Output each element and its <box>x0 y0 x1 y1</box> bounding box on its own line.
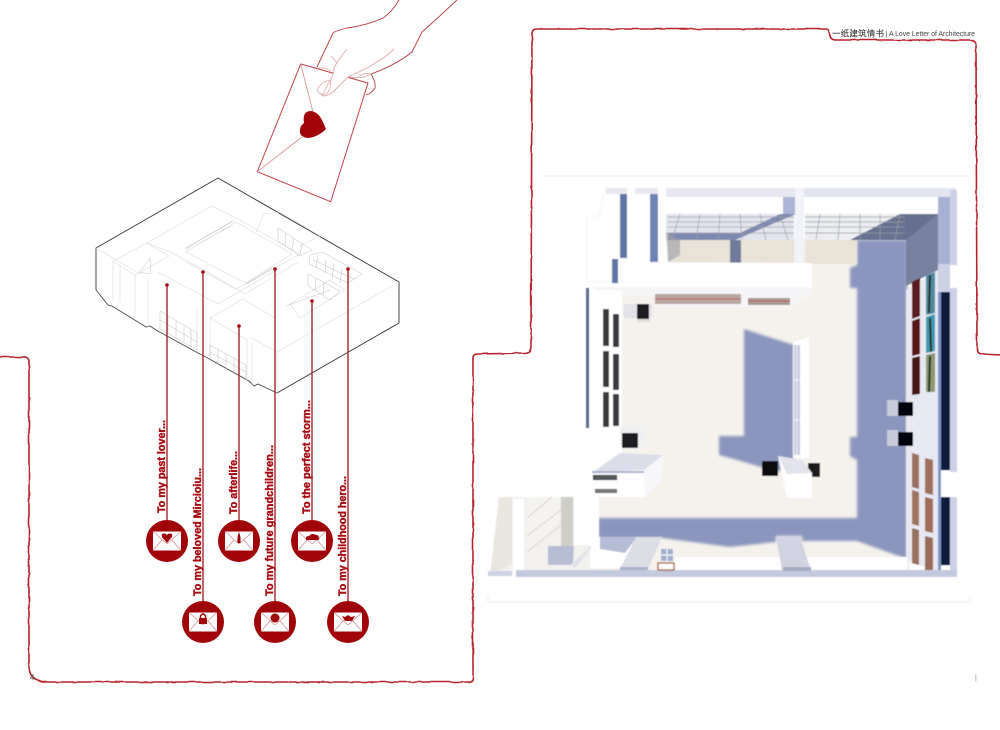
painting panels: coloured <box>912 272 935 395</box>
pin: childhood hero <box>346 267 350 603</box>
page number: 4 <box>30 673 35 682</box>
icon: envelope with storm cloud <box>291 520 333 562</box>
isometric building model <box>96 178 399 393</box>
label: To afterlife: To afterlife... <box>228 451 240 514</box>
illustration: hand holding love letter <box>257 0 457 202</box>
skylight grid: right bay <box>805 196 940 264</box>
pin: beloved Mircioiu <box>201 270 205 603</box>
icon: envelope with padlock <box>182 601 224 643</box>
icon: envelope with crown <box>327 601 369 643</box>
pin: afterlife <box>237 324 241 522</box>
right wall display boxes <box>887 400 913 446</box>
pin: past lover <box>165 283 169 522</box>
page header title: 一纸建筑情书 <box>832 28 884 38</box>
plinth outline <box>488 176 970 602</box>
shelf grids <box>160 311 197 350</box>
envelope <box>257 64 368 202</box>
central partition wall <box>793 337 809 458</box>
left wall window panels <box>603 309 619 427</box>
skylight grid: left bay <box>659 188 796 264</box>
front ledge <box>488 557 957 577</box>
outer volume <box>96 178 399 393</box>
page header title: | <box>886 31 888 38</box>
floor <box>598 238 910 572</box>
label: To my future grandchildren: To my future grandchildren... <box>264 445 276 596</box>
floor shadow areas <box>598 240 907 559</box>
front pedestals <box>620 537 811 571</box>
ceiling beams <box>666 188 957 265</box>
brick strip <box>655 294 790 305</box>
central pedestal with display boxes <box>762 456 820 498</box>
label: To the perfect storm: To the perfect storm... <box>301 400 313 514</box>
hand outline <box>317 0 457 96</box>
icon: envelope with globe <box>254 601 296 643</box>
lower left alcove <box>488 497 640 575</box>
painting panels: lower <box>912 453 933 570</box>
icon: envelope with heart <box>146 520 188 562</box>
page header title <box>832 28 975 38</box>
display box: top left <box>624 304 652 322</box>
corner pedestal <box>592 426 663 497</box>
right wall <box>906 214 938 572</box>
left wall <box>586 288 622 472</box>
rendered interior plan view <box>488 176 970 602</box>
pin: perfect storm <box>310 299 314 522</box>
marker pins <box>165 267 350 603</box>
label: To my childhood hero: To my childhood hero... <box>337 476 349 596</box>
label: To my beloved Mircioiu: To my beloved Mircioiu... <box>192 468 204 596</box>
right doorways <box>938 264 957 575</box>
label: To my past lover: To my past lover... <box>156 420 168 513</box>
heart seal <box>300 111 326 138</box>
interior rooms <box>96 206 399 393</box>
pin: grandchildren <box>273 267 277 603</box>
entry windows and sign <box>658 549 674 570</box>
page tick: | <box>975 675 977 682</box>
icon: envelope with candle <box>218 520 260 562</box>
page header title: A Love Letter of Architecture <box>889 31 975 38</box>
white overhead band <box>592 262 812 307</box>
left piers <box>587 188 659 283</box>
